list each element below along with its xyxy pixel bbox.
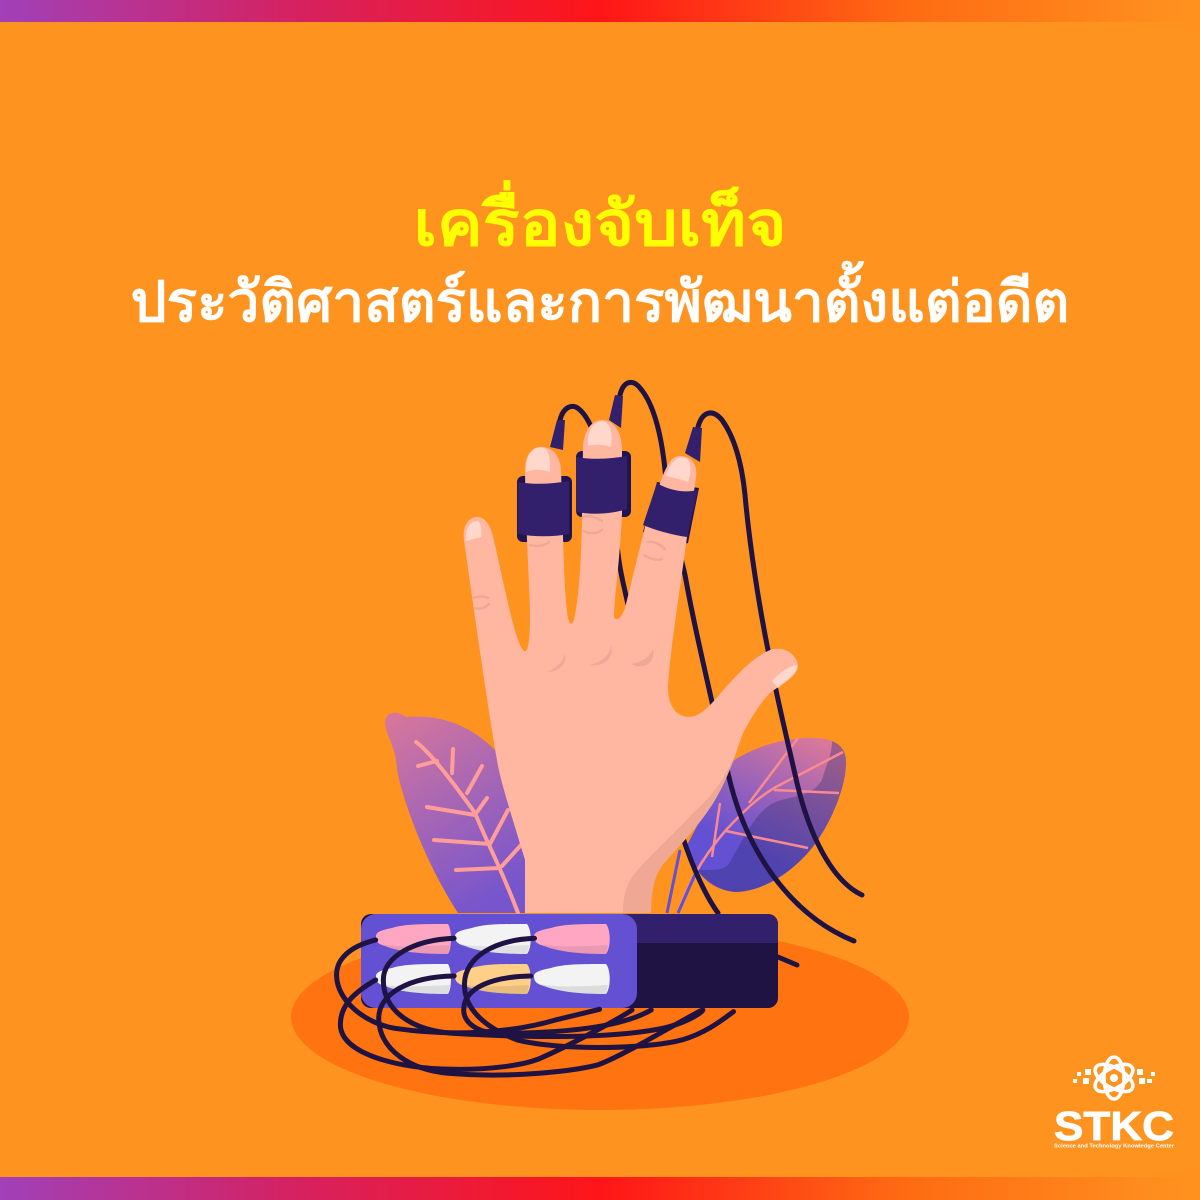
left leaf [385, 713, 530, 913]
polygraph machine [361, 914, 778, 1008]
ground ellipse [291, 924, 909, 1110]
right leaf [667, 738, 846, 913]
wires behind hand [560, 382, 862, 965]
bottom gradient bar [0, 1177, 1200, 1200]
tangled cables [337, 938, 733, 1075]
logo: atom icon [1091, 1057, 1137, 1099]
logo: tagline: Science and Technology Knowledge Center [1054, 1144, 1175, 1150]
machine plugs [376, 924, 610, 994]
top gradient bar [0, 0, 1200, 22]
title: subtitle: ประวัติศาสตร์และการพัฒนาตั้งแต่อดีต [131, 260, 1069, 333]
finger band backs [517, 451, 699, 545]
wrist shadow [623, 733, 745, 913]
title: headline: เครื่องจับเท็จ [414, 180, 786, 258]
sensor connectors [550, 395, 702, 462]
nails [466, 521, 481, 541]
hand [464, 420, 798, 913]
STKC logo [1054, 1057, 1175, 1150]
finger bands [518, 456, 698, 537]
logo: pixel squares [1073, 1069, 1155, 1084]
logo: wordmark: STKC [1054, 1103, 1174, 1149]
creases [547, 645, 653, 672]
